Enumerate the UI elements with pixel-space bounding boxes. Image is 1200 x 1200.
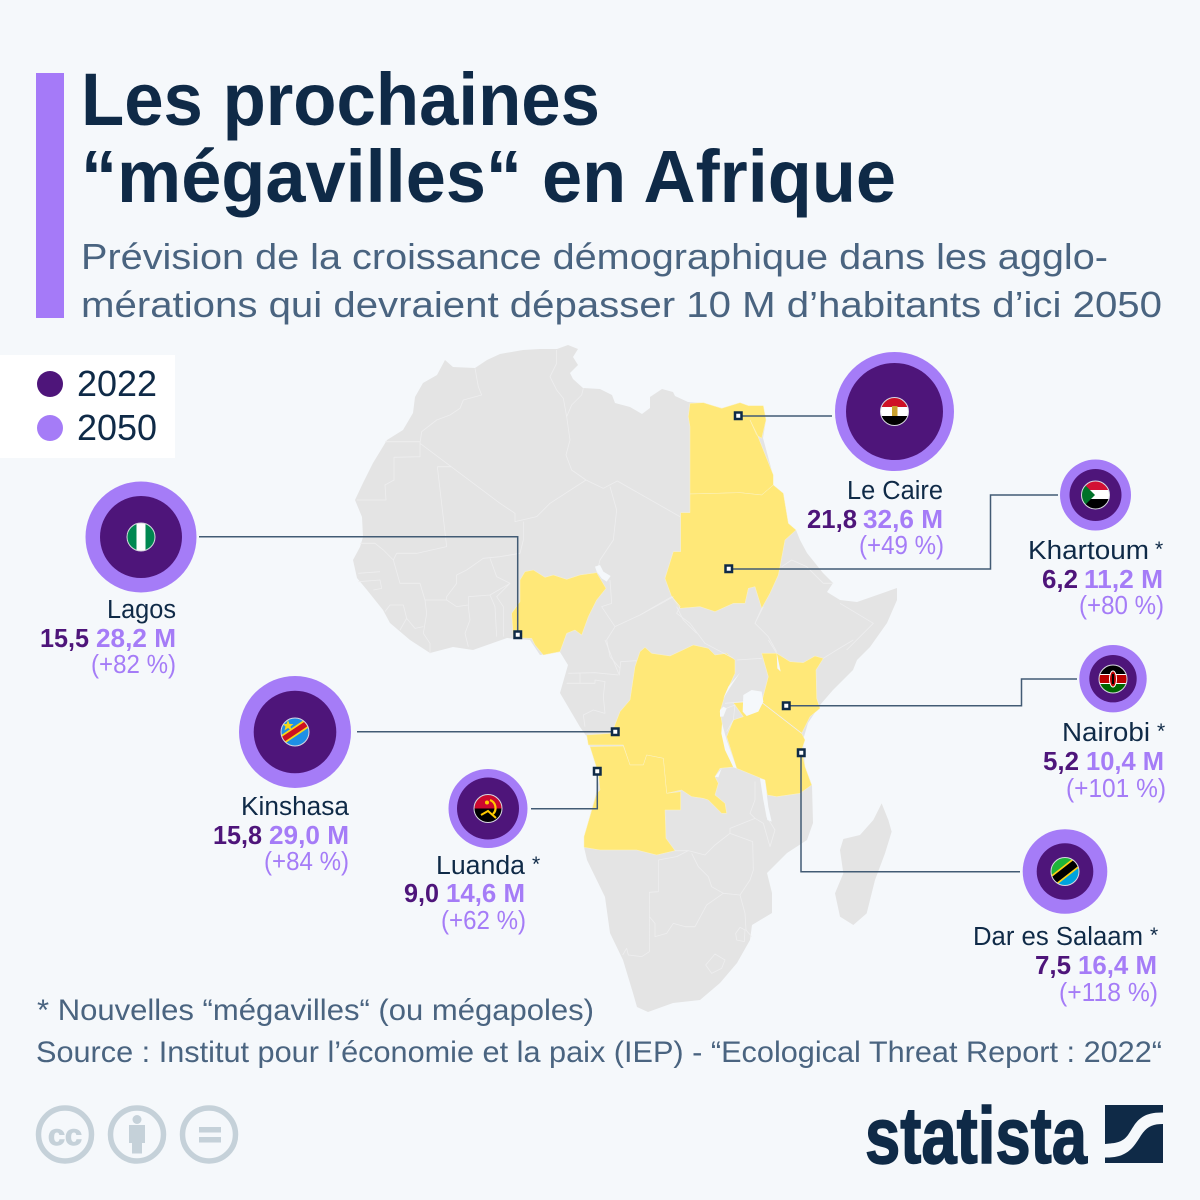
- icon: flag of Tanzania: [1049, 857, 1081, 886]
- callout: Kinshasa: [213, 676, 618, 876]
- icon: flag of Egypt: [880, 397, 909, 427]
- callout: Kinshasa: 29,0 M: [269, 822, 349, 850]
- footnote and source: [36, 994, 1162, 1069]
- callout: Nairobi: *: [1157, 720, 1165, 743]
- callout: Lagos: 28,2 M: [96, 625, 176, 653]
- callout: Lagos: 15,5: [40, 625, 89, 653]
- callout: Dar es Salaam: (+118 %): [1059, 979, 1158, 1007]
- callout: Khartoum: 6,2: [1042, 566, 1078, 594]
- callout: Khartoum: *: [1155, 538, 1163, 561]
- callout: Nairobi: Nairobi: [1062, 719, 1150, 747]
- icon: flag of Angola: [474, 794, 502, 823]
- callout: Kinshasa: (+84 %): [264, 848, 349, 876]
- callout: Luanda: Luanda: [436, 852, 526, 880]
- callout: Lagos: [40, 482, 521, 679]
- callout: Lagos: Lagos: [107, 596, 176, 624]
- country borders, north-east: [640, 560, 873, 658]
- footnote and source: * Nouvelles “mégavilles“ (ou mégapoles): [37, 994, 594, 1027]
- icon: flag of Nigeria: [127, 523, 155, 551]
- accent bar: [36, 73, 64, 318]
- callout: Le Caire: Le Caire: [847, 477, 943, 505]
- callout: Dar es Salaam: [798, 750, 1158, 1007]
- Lake Chad: [595, 565, 611, 582]
- legend: 2050: [77, 407, 157, 448]
- continent landmass: [353, 345, 897, 1012]
- callout: Nairobi: 10,4 M: [1086, 748, 1164, 776]
- callout: Dar es Salaam: 16,4 M: [1078, 952, 1157, 980]
- callout: Lagos: (+82 %): [91, 651, 176, 679]
- callout: Khartoum: 11,2 M: [1084, 566, 1163, 594]
- lakes: [715, 653, 781, 822]
- callout: Luanda: 14,6 M: [446, 880, 525, 908]
- callout: Kinshasa: 15,8: [213, 822, 262, 850]
- callout: Khartoum: Khartoum: [1028, 537, 1149, 565]
- callout: Nairobi: (+101 %): [1066, 775, 1166, 803]
- icon: creative commons licence badges: cc: [48, 1119, 82, 1152]
- icon: flag of Sudan: [1081, 481, 1110, 510]
- country borders, south: [567, 640, 853, 973]
- callout: Luanda: 9,0: [404, 880, 439, 908]
- Madagascar: [835, 803, 892, 925]
- icon: creative commons licence badges: [38, 1108, 236, 1161]
- callout: Luanda: *: [532, 853, 540, 876]
- title: “mégavilles“ en Afrique: [81, 135, 896, 218]
- callout: Kinshasa: Kinshasa: [241, 793, 350, 821]
- Egypt and Sudan: [665, 403, 796, 612]
- country borders, west and north: [357, 350, 697, 668]
- title: Les prochaines: [81, 58, 600, 141]
- subtitle: [81, 236, 1162, 325]
- callout: Luanda: (+62 %): [441, 907, 526, 935]
- statista logo: statista: [865, 1091, 1087, 1180]
- legend: 2022: [77, 363, 157, 404]
- DR Congo, Angola, Kenya and Tanzania: [584, 645, 823, 855]
- callout: Dar es Salaam: 7,5: [1035, 952, 1071, 980]
- callout: Le Caire: (+49 %): [859, 532, 944, 560]
- subtitle: mérations qui devraient dépasser 10 M d’habitants d’ici 2050: [81, 284, 1162, 325]
- title: [81, 58, 896, 218]
- callout: Dar es Salaam: Dar es Salaam: [973, 923, 1143, 951]
- callout: Khartoum: [726, 460, 1164, 620]
- callout: Le Caire: [735, 352, 954, 560]
- icon: flag of DR Congo: [279, 718, 309, 746]
- callout: Le Caire: 32,6 M: [863, 506, 943, 534]
- legend: [0, 355, 175, 458]
- footnote and source: Source : Institut pour l’économie et la paix (IEP) - “Ecological Threat Report : 2022“: [36, 1036, 1162, 1069]
- callout: Khartoum: (+80 %): [1079, 592, 1164, 620]
- callout: Nairobi: [783, 645, 1166, 803]
- map of Africa: [353, 345, 897, 1012]
- callout: Luanda: [404, 768, 600, 935]
- Nigeria: [512, 570, 606, 655]
- callout: Dar es Salaam: *: [1150, 924, 1158, 947]
- icon: flag of Kenya: [1099, 665, 1127, 693]
- callout: Nairobi: 5,2: [1043, 748, 1079, 776]
- callout: Le Caire: 21,8: [807, 506, 857, 534]
- subtitle: Prévision de la croissance démographique dans les agglo-: [81, 236, 1108, 277]
